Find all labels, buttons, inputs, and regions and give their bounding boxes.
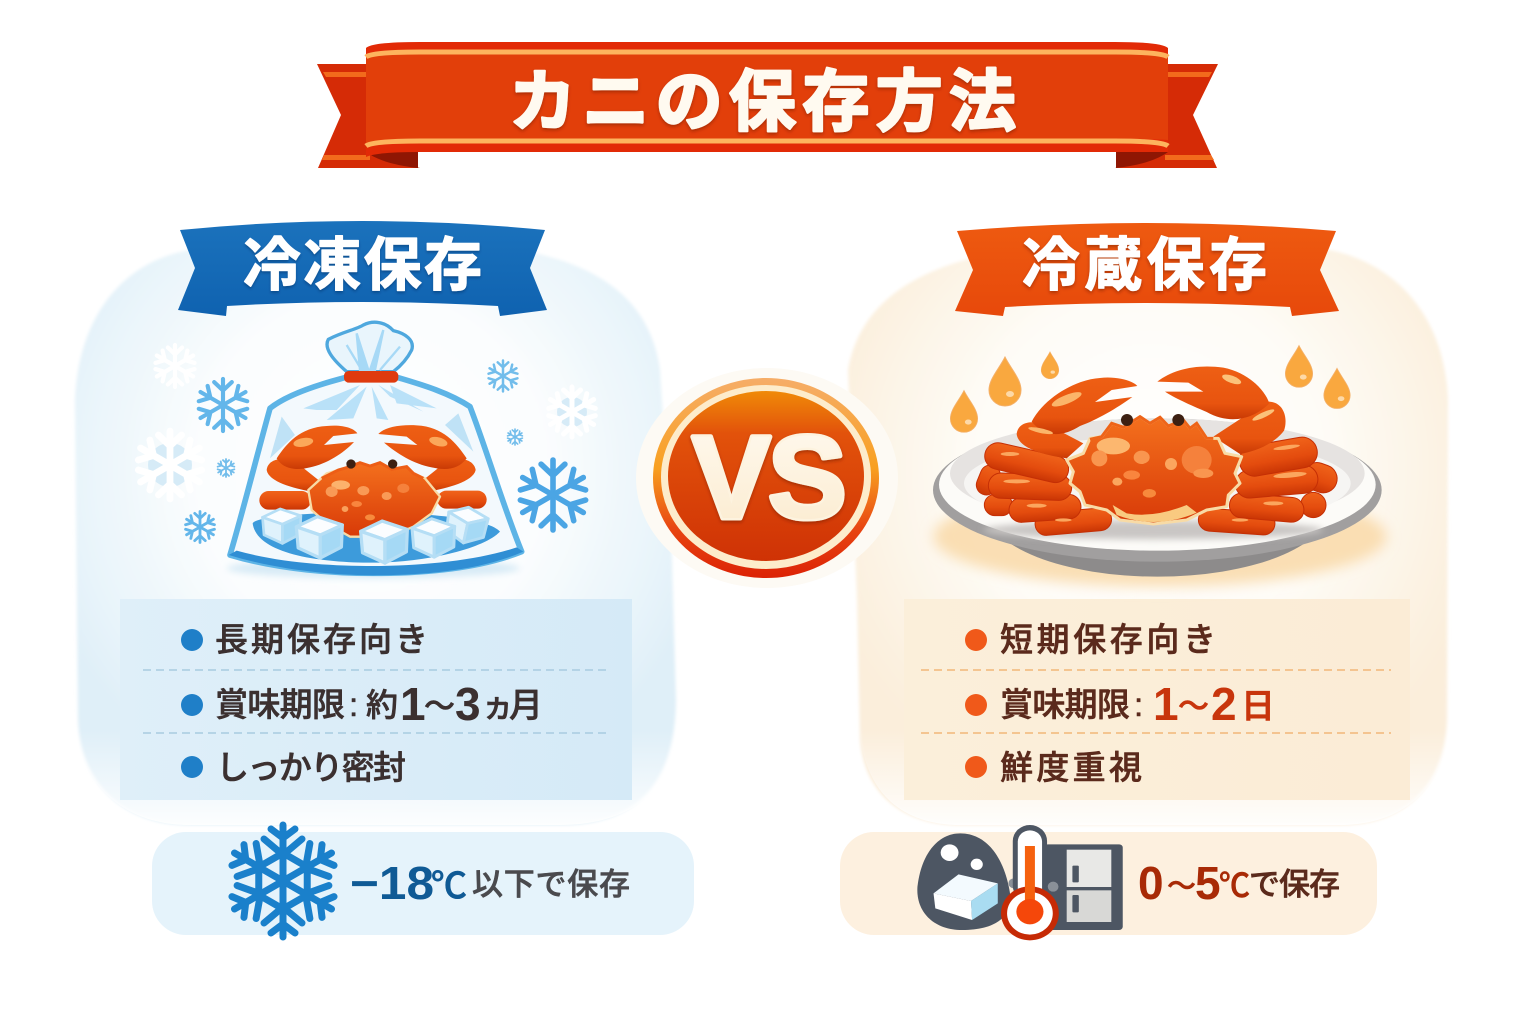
row: best-before period: 約 — [366, 687, 398, 723]
refrigerated heading banner — [955, 223, 1339, 316]
row: best-before period — [181, 678, 543, 730]
row: best-before days: 2 — [1211, 678, 1237, 730]
row: long-term storage: 長期保存向き — [215, 621, 428, 658]
crab eyes — [1121, 414, 1184, 426]
frozen temperature text: 以下で保存 — [472, 867, 630, 902]
icon: fridge thermometer and ice — [917, 825, 1123, 940]
row: best-before period: : — [349, 686, 358, 723]
refrigerated temperature text: 5 — [1195, 857, 1221, 909]
frozen temperature text: −18 — [350, 857, 434, 909]
row: best-before period: 月 — [509, 687, 543, 725]
ice cubes — [262, 503, 490, 563]
row: best-before period: 賞味期限 — [215, 686, 345, 723]
panel: refrigerated storage — [848, 250, 1448, 825]
refrigerated temperature text: で保存 — [1249, 867, 1340, 902]
crab shell — [1067, 414, 1242, 524]
title text: カニの保存方法 — [509, 65, 1016, 140]
VS badge — [636, 368, 898, 588]
refrigerated list — [921, 621, 1391, 786]
row: best-before period: 1 — [400, 678, 426, 730]
row: best-before days: 〜 — [1178, 689, 1209, 724]
refrigerated temperature text: ℃ — [1219, 867, 1250, 904]
row: best-before days: : — [1134, 686, 1143, 723]
row: best-before period: 3 — [455, 678, 481, 730]
bag tie — [344, 371, 398, 383]
refrigerated temperature text: 〜 — [1167, 871, 1196, 903]
VS text: V — [692, 412, 771, 544]
row: freshness priority: 鮮度重視 — [1000, 749, 1142, 786]
refrigerated temperature text: 0 — [1138, 857, 1164, 909]
snowflakes: frozen illustration — [135, 345, 598, 542]
icon: plate with crab — [933, 367, 1387, 587]
refrigerated facts box — [904, 599, 1410, 800]
row: best-before period: ヵ — [482, 688, 514, 724]
refrigerated temperature pill — [840, 825, 1377, 940]
refrigerated heading text: 冷蔵保存 — [1022, 233, 1267, 298]
frozen heading text: 冷凍保存 — [243, 233, 482, 298]
row: short-term storage: 短期保存向き — [1000, 621, 1216, 658]
row: best-before period: 〜 — [424, 689, 455, 724]
title ribbon — [317, 42, 1218, 168]
row: best-before days: 1 — [1153, 678, 1179, 730]
row: best-before days — [965, 678, 1275, 730]
row: best-before days: 賞味期限 — [1000, 686, 1130, 723]
crab in bag — [259, 425, 487, 537]
crab legs — [973, 435, 1341, 536]
frozen temperature pill — [152, 825, 694, 937]
row: seal tightly: しっかり密封 — [216, 749, 406, 786]
frozen heading banner — [178, 221, 547, 316]
frozen facts box — [120, 599, 632, 800]
frozen temperature text: ℃ — [431, 865, 467, 906]
VS text: S — [768, 412, 847, 544]
refrigerated temperature text — [1138, 857, 1340, 909]
frozen list — [143, 621, 606, 786]
bag top frill — [327, 322, 412, 372]
frozen temperature text — [350, 857, 630, 909]
icon: blue snowflake — [222, 825, 344, 937]
icon: orange droplets — [950, 346, 1350, 432]
crab claws — [1017, 367, 1286, 458]
row: best-before days: 日 — [1241, 688, 1275, 726]
icon: bag with crab and ice — [227, 322, 523, 578]
panel: frozen storage — [75, 250, 676, 825]
